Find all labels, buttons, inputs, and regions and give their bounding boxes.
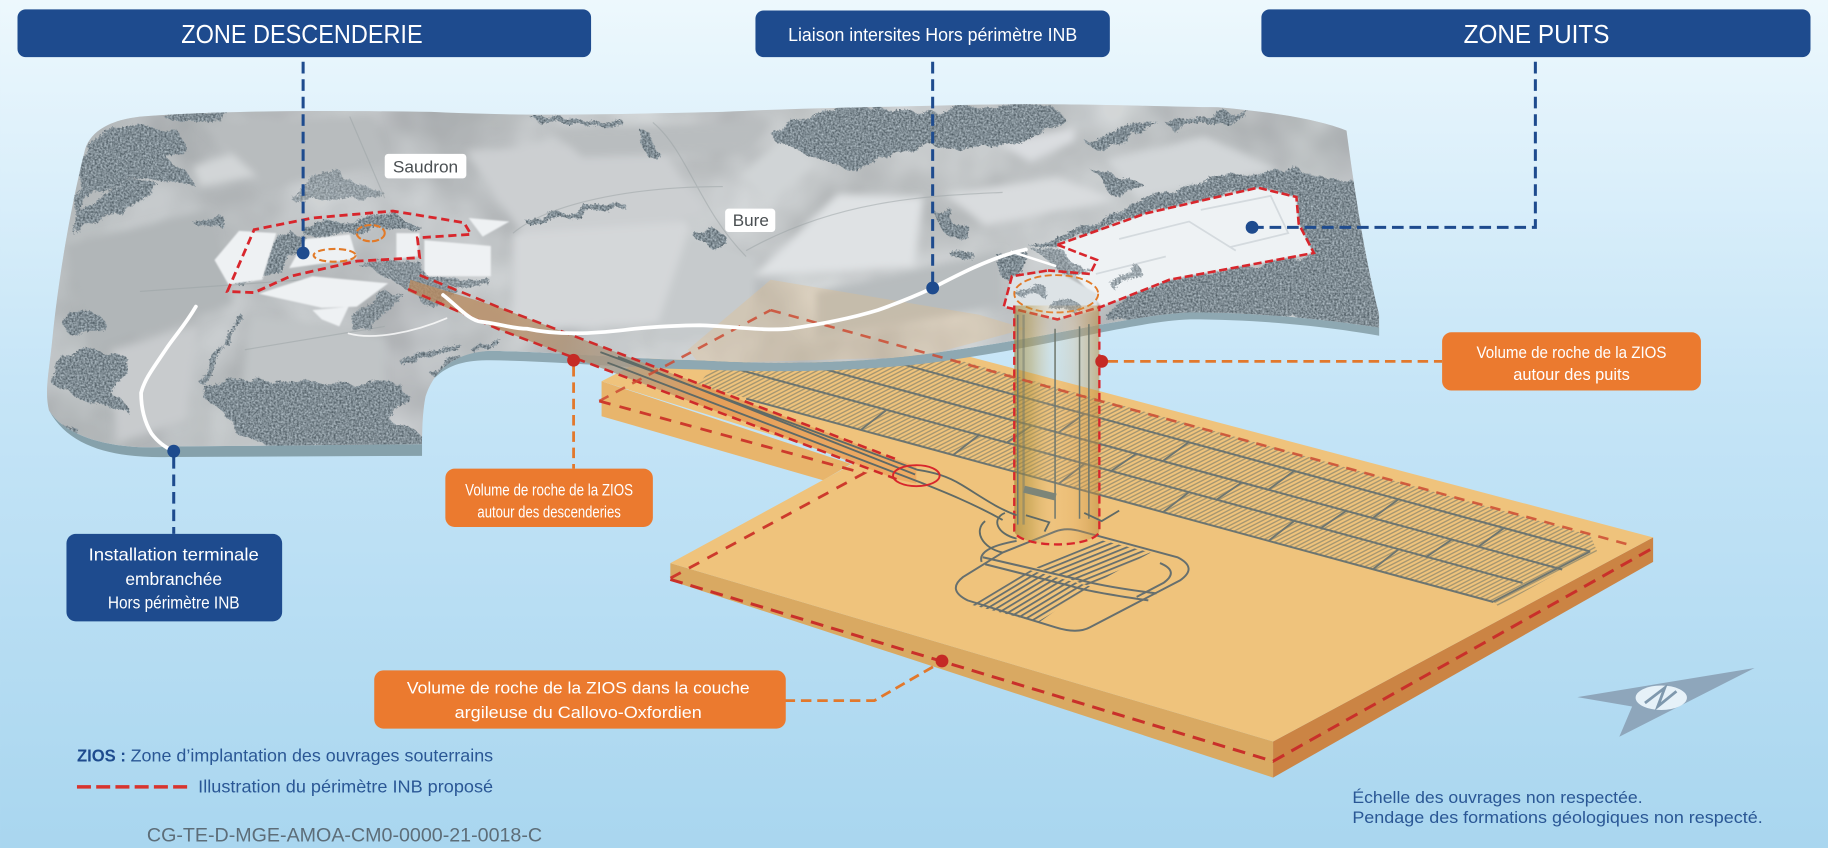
- place label: Bure: [725, 209, 775, 232]
- fields: [64, 117, 1280, 449]
- terrain block: [35, 93, 1399, 466]
- leader: installation terminale: [167, 445, 180, 534]
- field boundaries: [140, 117, 1003, 350]
- heading: zone puits: ZONE PUITS: [1464, 21, 1609, 49]
- callout: volume de roche autour des puits: autour des puits: [1513, 365, 1630, 384]
- callout: volume de roche Callovo-Oxfordien: Volume de roche de la ZIOS dans la couche: [407, 679, 750, 698]
- callout: volume de roche autour des descenderies: [445, 469, 653, 527]
- legend: [77, 745, 493, 797]
- leader: volume puits: [1095, 355, 1442, 368]
- scale note: Pendage des formations géologiques non respecté.: [1352, 809, 1763, 827]
- place label: Bure: Bure: [733, 211, 769, 230]
- heading: zone descenderie: [18, 9, 591, 57]
- legend: Zone d’implantation des ouvrages souterrains: [131, 745, 493, 765]
- heading: liaison intersites: [755, 10, 1110, 57]
- repository storage tunnels, main zone: [697, 308, 1597, 606]
- callout: installation terminale embranchée: Installation terminale: [89, 545, 259, 565]
- legend: ZIOS :: [77, 745, 126, 765]
- callout: volume de roche autour des descenderies: Volume de roche de la ZIOS: [465, 480, 633, 499]
- pilot tunnels, small loop zone: [956, 529, 1189, 631]
- INB perimeter dashed outline on slab: [599, 310, 1653, 761]
- callout: volume de roche Callovo-Oxfordien: argileuse du Callovo-Oxfordien: [455, 703, 702, 722]
- scale note: Échelle des ouvrages non respectée.: [1352, 788, 1643, 807]
- callout: volume de roche autour des puits: Volume de roche de la ZIOS: [1476, 343, 1667, 362]
- callout: installation terminale embranchée: [66, 534, 282, 621]
- place label: Saudron: [385, 154, 466, 178]
- leader: volume Callovo-Oxfordien: [785, 655, 948, 701]
- callout: installation terminale embranchée: embranchée: [125, 569, 222, 589]
- document reference code: CG-TE-D-MGE-AMOA-CM0-0000-21-0018-C: [147, 825, 542, 847]
- leader: liaison intersites: [926, 62, 939, 294]
- leader: zone puits: [1246, 62, 1535, 234]
- forests: [52, 105, 1387, 448]
- callout: volume de roche autour des puits: [1442, 332, 1701, 391]
- underground rock slab: ZIOS Callovo-Oxfordien: [602, 301, 1653, 778]
- callout: volume de roche autour des descenderies: autour des descenderies: [477, 503, 621, 522]
- shaft rock volume column: [1014, 305, 1099, 544]
- white roads: [141, 249, 1055, 451]
- place label: Saudron: Saudron: [393, 158, 458, 177]
- scale note: [1352, 788, 1763, 827]
- callout: installation terminale embranchée: Hors périmètre INB: [108, 593, 240, 613]
- leader: zone descenderie: [297, 62, 310, 259]
- zone puits: surface site: [1004, 188, 1314, 319]
- heading: zone descenderie: ZONE DESCENDERIE: [181, 21, 423, 49]
- heading: liaison intersites: Liaison intersites Hors périmètre INB: [788, 25, 1077, 45]
- callout: volume de roche Callovo-Oxfordien: [374, 670, 786, 729]
- zone descenderie: surface site: [215, 211, 509, 332]
- legend: Illustration du périmètre INB proposé: [198, 777, 493, 797]
- icon: north compass: [1577, 668, 1755, 737]
- leader: volume descenderies: [567, 354, 580, 469]
- heading: zone puits: [1261, 9, 1810, 57]
- tint of slab beneath terrain: [688, 280, 1026, 364]
- descenderie rock volume corridor: [408, 275, 1119, 553]
